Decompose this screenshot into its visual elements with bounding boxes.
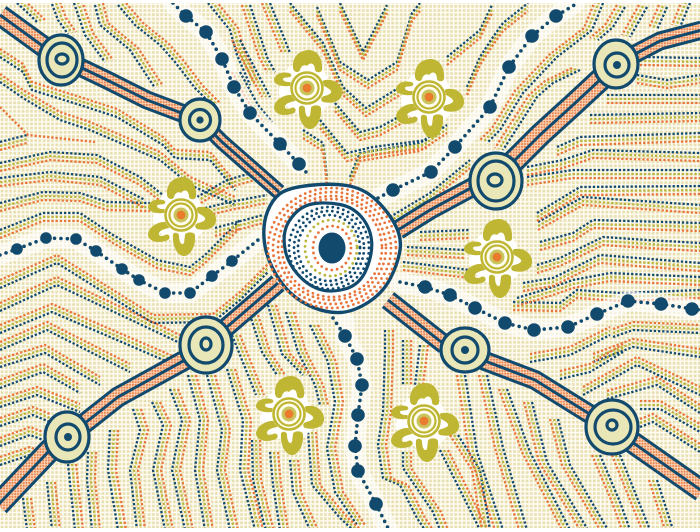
trail: north-east dots — [378, 4, 576, 198]
trail: north-west dots — [173, 3, 306, 172]
waterhole node: lower right — [441, 328, 489, 372]
waterhole node: upper left — [180, 99, 220, 141]
waterhole node: bottom left — [45, 412, 89, 462]
trail: east dots — [400, 280, 700, 337]
turtle: top centre right — [396, 59, 464, 138]
turtle: top centre left — [274, 50, 342, 129]
waterhole node: top right — [594, 40, 638, 88]
turtle: bottom left — [256, 376, 324, 455]
waterhole node: bottom right — [586, 400, 638, 454]
waterhole node: lower left — [180, 317, 232, 373]
trail: west dots — [0, 232, 258, 299]
road: south-west — [0, 283, 278, 505]
waterhole node: top left — [39, 35, 83, 85]
turtle: right — [464, 219, 532, 298]
road: north-west — [0, 15, 279, 192]
road: south-east — [388, 300, 700, 491]
central hub — [264, 184, 400, 313]
trail: south dots — [333, 318, 390, 532]
road: north-east — [398, 30, 700, 230]
turtle: left — [148, 177, 216, 256]
waterhole node: upper right — [470, 153, 522, 209]
turtle: bottom right — [391, 383, 459, 462]
